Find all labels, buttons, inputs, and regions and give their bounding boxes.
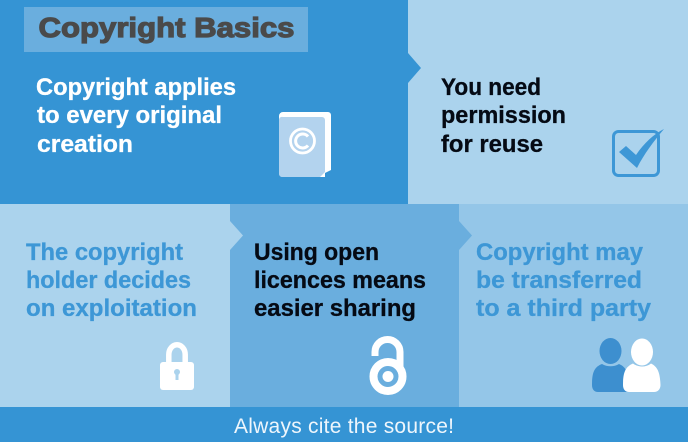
text: you need permission: You need xyxy=(441,74,541,101)
text: copyright applies: Copyright applies xyxy=(36,74,236,101)
icon: open access padlock xyxy=(374,340,402,391)
title box xyxy=(24,7,308,52)
text: copyright applies: to every original xyxy=(37,102,222,129)
panel: open licences xyxy=(230,204,459,407)
panel: third party xyxy=(459,204,688,407)
text: copyright holder: on exploitation xyxy=(26,295,197,322)
text: open licences: Using open xyxy=(254,239,379,266)
text: third party: to a third party xyxy=(476,295,652,322)
arrow: top panel pointer xyxy=(408,53,421,83)
text: copyright holder xyxy=(26,239,197,322)
text: copyright applies xyxy=(36,74,236,158)
icon: closed padlock xyxy=(160,345,194,390)
panel: copyright applies xyxy=(0,0,408,204)
text: you need permission: for reuse xyxy=(441,131,543,158)
arrow: middle lower pointer xyxy=(459,221,472,250)
text: copyright holder: The copyright xyxy=(26,239,183,266)
text: third party: Copyright may xyxy=(476,239,644,266)
icon: checkbox xyxy=(614,129,664,176)
title: Copyright Basics xyxy=(38,12,294,43)
footer xyxy=(0,407,688,442)
text: third party xyxy=(476,239,652,322)
text: open licences: licences means xyxy=(254,267,426,294)
footer text: Always cite the source! xyxy=(234,415,454,438)
icon: two people xyxy=(592,338,660,392)
text: open licences xyxy=(254,239,426,322)
arrow: left lower pointer xyxy=(230,221,243,250)
text: you need permission: permission xyxy=(441,102,566,129)
text: copyright holder: holder decides xyxy=(26,267,191,294)
text: you need permission xyxy=(441,74,566,158)
panel: copyright holder xyxy=(0,204,230,407)
text: copyright applies: creation xyxy=(37,131,133,158)
panel: you need permission xyxy=(408,0,688,204)
icon: book with copyright symbol xyxy=(279,112,331,177)
text: open licences: easier sharing xyxy=(254,295,416,322)
text: third party: be transferred xyxy=(476,267,642,294)
